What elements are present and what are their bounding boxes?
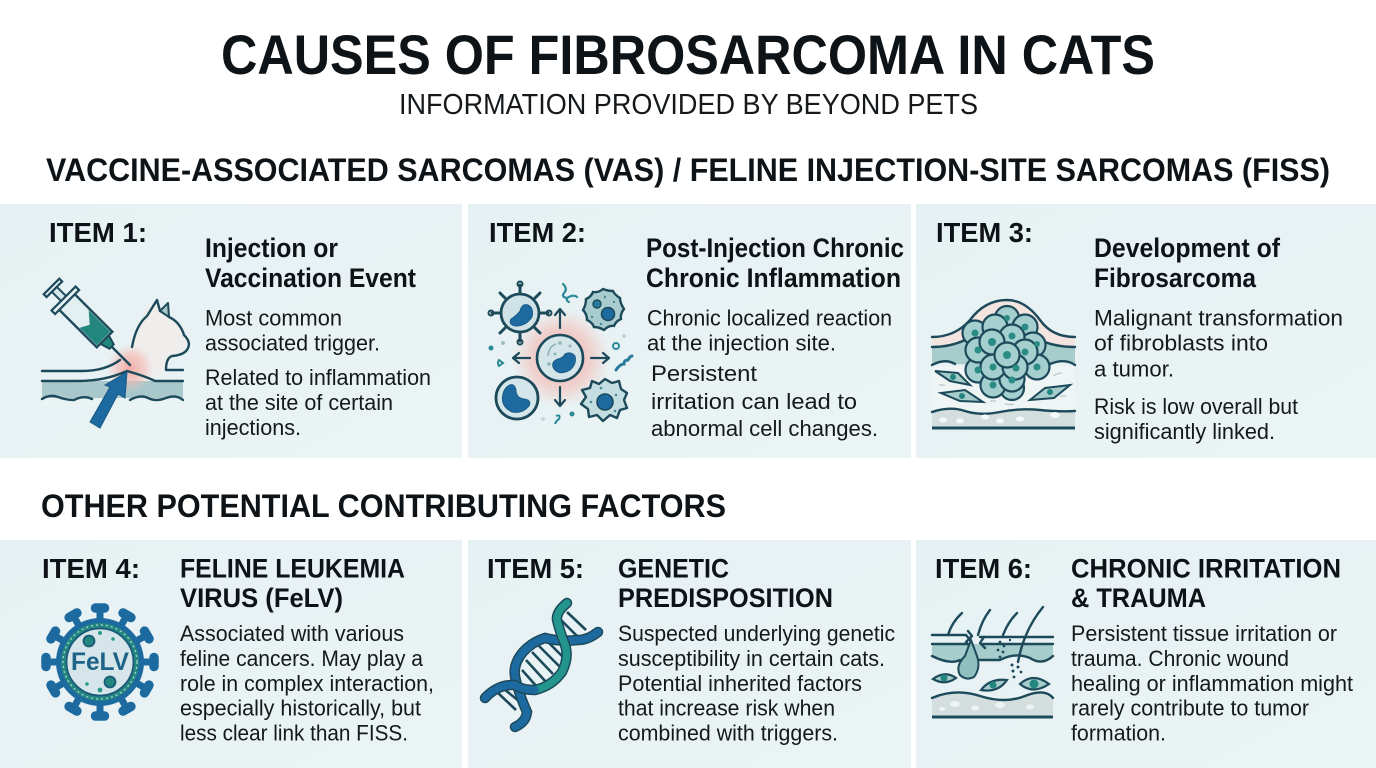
item 1 heading: Vaccination Event <box>205 263 416 293</box>
item 3 heading <box>1094 233 1280 293</box>
subtitle: INFORMATION PROVIDED BY BEYOND PETS <box>399 89 978 121</box>
item 1 body: at the site of certain <box>205 390 393 415</box>
item 3 body: Risk is low overall but <box>1094 394 1299 419</box>
item 3 body: significantly linked. <box>1094 419 1275 444</box>
item 6 heading: & TRAUMA <box>1071 583 1206 613</box>
item 6 body: healing or inflammation might <box>1071 671 1354 696</box>
icon: FeLV virus <box>46 608 154 716</box>
item 4 body: especially historically, but <box>180 696 422 720</box>
panel: item 2 <box>468 204 911 458</box>
icon: inflammatory cells <box>488 282 632 424</box>
item 3 heading: Fibrosarcoma <box>1094 263 1256 293</box>
item 2 heading: Chronic Inflammation <box>646 263 901 293</box>
item 3 label: ITEM 3: <box>936 217 1033 248</box>
item 6 heading <box>1071 554 1341 613</box>
item 4 heading <box>180 554 405 613</box>
item 6 body: trauma. Chronic wound <box>1071 646 1289 671</box>
item 3 body: Malignant transformation <box>1094 306 1343 330</box>
title: CAUSES OF FIBROSARCOMA IN CATS <box>221 23 1155 86</box>
item 5 body: susceptibility in certain cats. <box>618 646 885 671</box>
item 2 body: irritation can lead to <box>651 389 857 414</box>
item 6 heading: CHRONIC IRRITATION <box>1071 554 1341 584</box>
item 1 label: ITEM 1: <box>49 217 147 248</box>
icon: syringe injecting cat <box>39 274 189 428</box>
panel: item 5 <box>468 540 911 768</box>
item 4 body: less clear link than FISS. <box>180 720 408 746</box>
item 1 heading: Injection or <box>205 233 338 263</box>
item 4 body <box>180 621 434 746</box>
item 1 body <box>205 306 431 440</box>
section heading: vaccine-associated: VACCINE-ASSOCIATED SARCOMAS (VAS) / FELINE INJECTION-SITE SARCOMAS (FISS) <box>46 152 1330 188</box>
item 6 label: ITEM 6: <box>935 553 1032 584</box>
item 2 heading: Post-Injection Chronic <box>646 233 904 263</box>
item 5 body: that increase risk when <box>618 696 835 720</box>
item 5 heading <box>618 554 833 613</box>
item 4 heading: FELINE LEUKEMIA <box>180 554 405 584</box>
item 3 body: of fibroblasts into <box>1094 330 1268 356</box>
item 4 body: role in complex interaction, <box>180 671 434 696</box>
panel: item 4 <box>0 540 462 768</box>
item 2 heading <box>646 233 904 293</box>
item 2 body: Chronic localized reaction <box>647 306 892 330</box>
virus label: FeLV <box>71 648 129 676</box>
item 4 label: ITEM 4: <box>42 553 140 584</box>
icon: irritated skin layers <box>932 607 1053 717</box>
item 5 heading: PREDISPOSITION <box>618 583 833 613</box>
item 1 heading <box>205 233 416 293</box>
item 2 body: abnormal cell changes. <box>651 416 878 441</box>
item 4 body: Associated with various <box>180 621 404 646</box>
item 1 body: associated trigger. <box>205 330 380 356</box>
item 2 body: at the injection site. <box>647 330 836 356</box>
item 2 body: Persistent <box>651 361 758 386</box>
item 4 body: feline cancers. May play a <box>180 646 423 671</box>
item 5 body <box>618 621 895 746</box>
item 1 body: Most common <box>205 306 342 330</box>
icon: DNA helix <box>485 603 598 727</box>
item 5 label: ITEM 5: <box>487 553 584 584</box>
item 1 body: injections. <box>205 415 301 440</box>
item 6 body: Persistent tissue irritation or <box>1071 621 1337 646</box>
item 2 label: ITEM 2: <box>489 217 586 248</box>
item 6 body: formation. <box>1071 720 1166 746</box>
item 1 body: Related to inflammation <box>205 365 431 390</box>
item 6 body: rarely contribute to tumor <box>1071 696 1309 720</box>
panel: item 1 <box>0 204 462 458</box>
panel: item 3 <box>916 204 1376 458</box>
section heading: other factors: OTHER POTENTIAL CONTRIBUTING FACTORS <box>41 488 726 524</box>
item 3 body <box>1094 306 1343 444</box>
item 5 body: Suspected underlying genetic <box>618 621 895 646</box>
item 4 heading: VIRUS (FeLV) <box>180 583 343 613</box>
panel: item 6 <box>916 540 1376 768</box>
item 3 body: a tumor. <box>1094 356 1174 382</box>
icon: tumor in tissue layers <box>932 300 1075 428</box>
item 2 body <box>647 306 892 441</box>
item 3 heading: Development of <box>1094 233 1280 263</box>
item 5 body: Potential inherited factors <box>618 671 862 696</box>
item 5 heading: GENETIC <box>618 554 729 584</box>
item 6 body <box>1071 621 1354 746</box>
item 5 body: combined with triggers. <box>618 720 838 746</box>
